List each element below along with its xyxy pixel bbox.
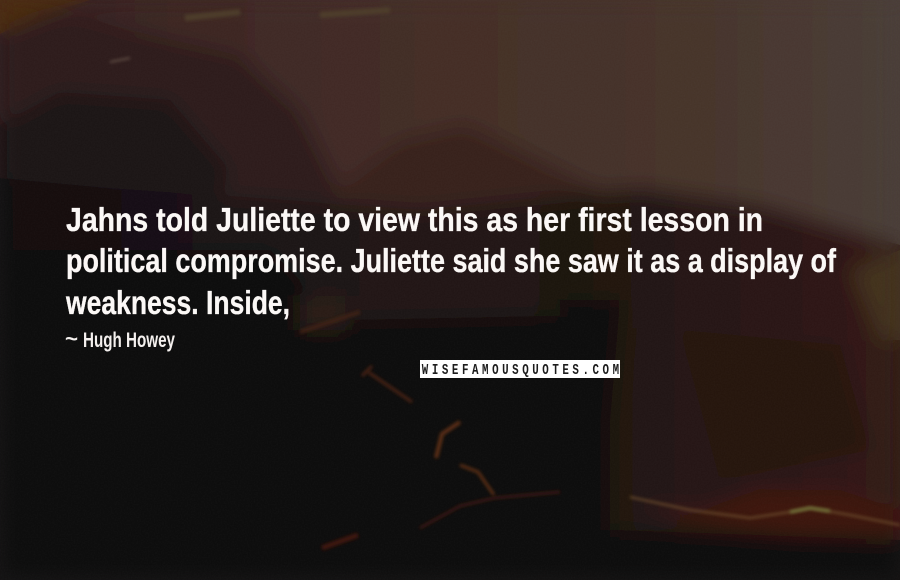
quote text: Jahns told Juliette to view this as her first lesson in	[66, 201, 763, 238]
watermark: WISEFAMOUSQUOTES.COM	[422, 361, 623, 379]
attribution: ~	[65, 328, 78, 351]
attribution	[65, 328, 175, 352]
quote text	[65, 201, 837, 321]
attribution: Hugh Howey	[83, 329, 175, 352]
quote text: weakness. Inside,	[65, 284, 290, 321]
